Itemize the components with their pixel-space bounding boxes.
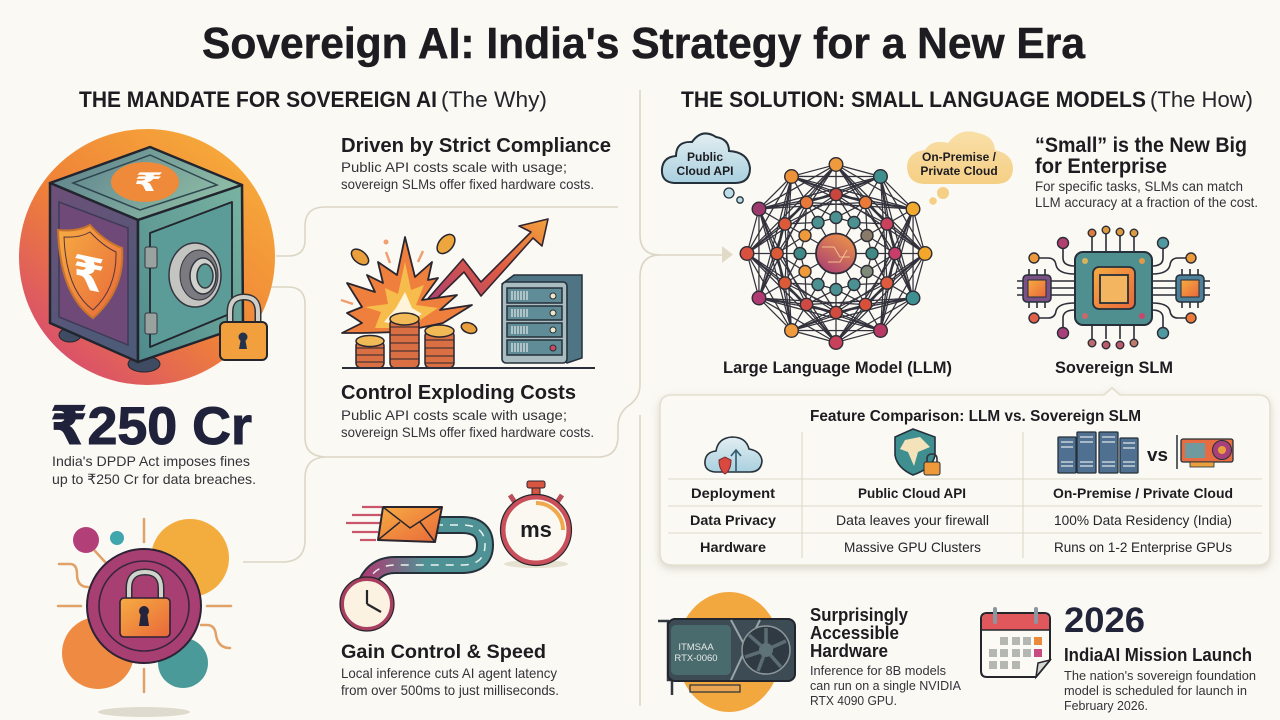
title: Sovereign AI: India's Strategy for a New Era [202, 19, 1086, 68]
text: accessible hardware: Hardware [810, 641, 888, 661]
icon: cloud with shield [705, 437, 762, 474]
text: accessible hardware: Inference for 8B models [810, 663, 946, 678]
stat: 250 crore fine: ₹250 Cr [50, 397, 252, 456]
icon: millisecond stopwatch [500, 481, 572, 568]
icon: millisecond stopwatch: ms [520, 517, 552, 542]
panel: feature comparison [660, 388, 1270, 565]
neural network: LLM [714, 132, 958, 375]
cloud: public cloud API: Public [687, 150, 723, 164]
text: exploding costs [341, 381, 594, 440]
server [502, 275, 582, 363]
heading: the how: (The How) [1150, 87, 1253, 112]
table rows: Data Privacy [690, 512, 776, 528]
icon: calendar [981, 609, 1050, 677]
icon: India shield [895, 429, 940, 475]
table rows: 100% Data Residency (India) [1054, 512, 1232, 528]
icon: exploding costs [341, 219, 595, 368]
text: small is new big: “Small” is the New Big [1035, 134, 1247, 157]
coin stacks [356, 313, 454, 368]
icon: secure safe: ₹ [129, 168, 165, 197]
text: small is new big: LLM accuracy at a fraction of the cost. [1035, 194, 1258, 210]
icon: GPU card [658, 592, 795, 712]
text: IndiaAI mission launch: IndiaAI Mission Launch [1064, 645, 1252, 665]
text: accessible hardware: Surprisingly [810, 605, 908, 625]
icon: GPU card: ITMSAA [678, 642, 714, 653]
text: strict compliance: sovereign SLMs offer fixed hardware costs. [341, 176, 594, 192]
text: strict compliance: Public API costs scale with usage; [341, 159, 567, 175]
text: exploding costs: Public API costs scale with usage; [341, 407, 567, 423]
text: IndiaAI mission launch: February 2026. [1064, 698, 1148, 713]
chip: sovereign SLM [1017, 226, 1210, 349]
stat: 250 crore fine: India's DPDP Act imposes fines [52, 453, 250, 469]
text: control and speed [341, 641, 559, 698]
text: control and speed: from over 500ms to just milliseconds. [341, 682, 559, 698]
label: SLM: Sovereign SLM [1055, 358, 1173, 377]
text: exploding costs: Control Exploding Costs [341, 381, 576, 404]
text: exploding costs: sovereign SLMs offer fixed hardware costs. [341, 424, 594, 440]
cloud: public cloud API [662, 133, 750, 203]
label: LLM: Large Language Model (LLM) [723, 358, 952, 377]
table rows: Hardware [700, 539, 766, 555]
text: accessible hardware [810, 605, 961, 708]
table rows [690, 485, 1233, 555]
text: small is new big: for Enterprise [1035, 155, 1167, 178]
table rows: Public Cloud API [858, 485, 966, 501]
heading: the how: THE SOLUTION: SMALL LANGUAGE MODELS [681, 87, 1146, 112]
icon: secure safe [19, 129, 275, 385]
icon: secure safe: ₹ [73, 245, 105, 303]
table rows: Massive GPU Clusters [844, 539, 981, 555]
text: small is new big [1035, 134, 1258, 210]
text: IndiaAI mission launch: 2026 [1064, 601, 1145, 640]
icon: padlock with circles [58, 519, 231, 717]
table rows: Deployment [691, 485, 775, 501]
heading: the why: (The Why) [441, 87, 547, 112]
table rows: Runs on 1-2 Enterprise GPUs [1054, 539, 1232, 555]
icon: GPU card: RTX-0060 [674, 653, 718, 664]
text: IndiaAI mission launch [1064, 601, 1256, 713]
connector lines [243, 90, 722, 706]
icon: servers versus GPU: vs [1147, 445, 1168, 465]
arrow into LLM network [722, 246, 733, 263]
text: small is new big: For specific tasks, SLMs can match [1035, 178, 1243, 194]
text: accessible hardware: RTX 4090 GPU. [810, 693, 897, 708]
cloud: public cloud API: Cloud API [677, 164, 733, 178]
text: control and speed: Local inference cuts AI agent latency [341, 665, 557, 681]
icon: servers versus GPU [1058, 432, 1233, 473]
text: IndiaAI mission launch: model is scheduled for launch in [1064, 683, 1247, 698]
text: accessible hardware: can run on a single NVIDIA [810, 678, 961, 693]
heading: the why: THE MANDATE FOR SOVEREIGN AI [79, 87, 437, 112]
heading: comparison: Feature Comparison: LLM vs. Sovereign SLM [810, 408, 1141, 425]
table rows: On-Premise / Private Cloud [1053, 485, 1233, 501]
text: control and speed: Gain Control & Speed [341, 641, 546, 663]
arrow: rising cost [425, 219, 548, 305]
stat: 250 crore fine [50, 397, 256, 487]
cloud: private cloud [907, 131, 1013, 205]
cloud: private cloud: Private Cloud [920, 164, 998, 178]
icon: fast delivery route [340, 481, 572, 631]
icon: padlock on safe [220, 297, 267, 360]
text: accessible hardware: Accessible [810, 623, 899, 643]
text: strict compliance [341, 134, 611, 192]
stat: 250 crore fine: up to ₹250 Cr for data breaches. [52, 471, 256, 487]
cloud: private cloud: On-Premise / [922, 150, 997, 164]
text: IndiaAI mission launch: The nation's sovereign foundation [1064, 668, 1256, 683]
text: strict compliance: Driven by Strict Compliance [341, 134, 611, 157]
table rows: Data leaves your firewall [836, 512, 989, 528]
